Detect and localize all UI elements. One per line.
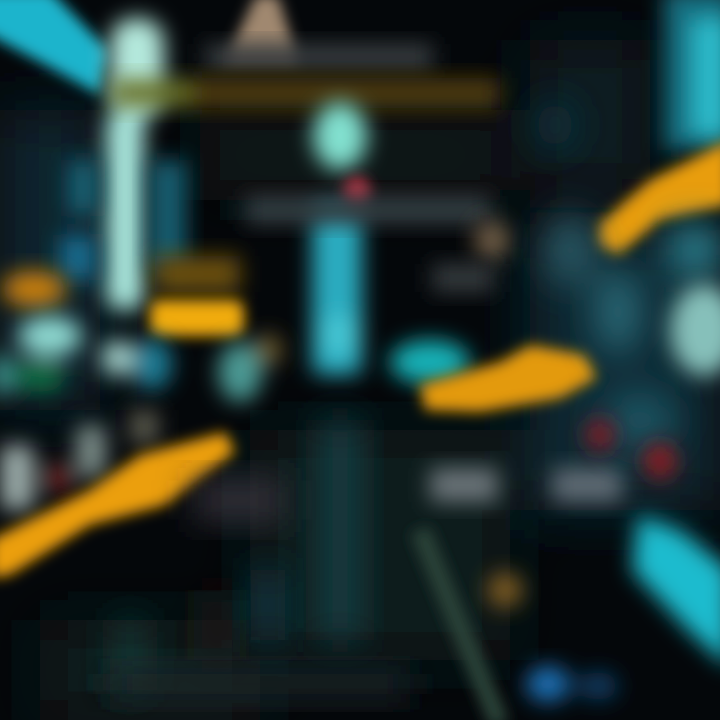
gray text [432,264,494,292]
footer bar [110,670,410,698]
blue button [526,666,618,702]
faint lower streaks [115,590,229,690]
gray dark label [195,480,285,520]
lower column [318,420,362,640]
cyan column [312,205,362,375]
icon: top-left cyan diagonal [0,0,108,95]
orange diagonal [598,140,720,255]
red markers [585,418,677,479]
beige icon [474,220,510,260]
icon: beige triangle [225,0,298,62]
panel: left column [0,0,285,690]
orange dot [487,572,523,608]
cyan top panel [664,0,720,150]
panel: header [112,0,500,108]
circle marker [313,102,367,170]
diagonal line [420,530,500,720]
orange marker [2,271,66,307]
subtitle bar [112,78,500,108]
teal blobs [535,101,720,450]
red marker [343,177,371,207]
title bar [205,44,433,70]
panel: right column [535,0,720,668]
panel: center column [245,102,490,640]
side column [250,570,286,640]
cyan blob [390,340,470,384]
orange band [420,345,597,412]
orange diagonal band [0,432,235,578]
left dark teal bars [60,160,98,280]
cyan bottom panel [632,515,720,668]
pale panel [670,284,720,376]
teal side bar [150,160,186,270]
gold block [155,256,240,292]
gray columns [0,410,158,510]
gray labels [430,468,622,502]
small pale and green blobs [0,316,282,402]
tall pale bar [106,18,164,310]
yellow bar [150,300,244,336]
panel: center right [110,220,622,720]
gray text bar [245,196,490,224]
